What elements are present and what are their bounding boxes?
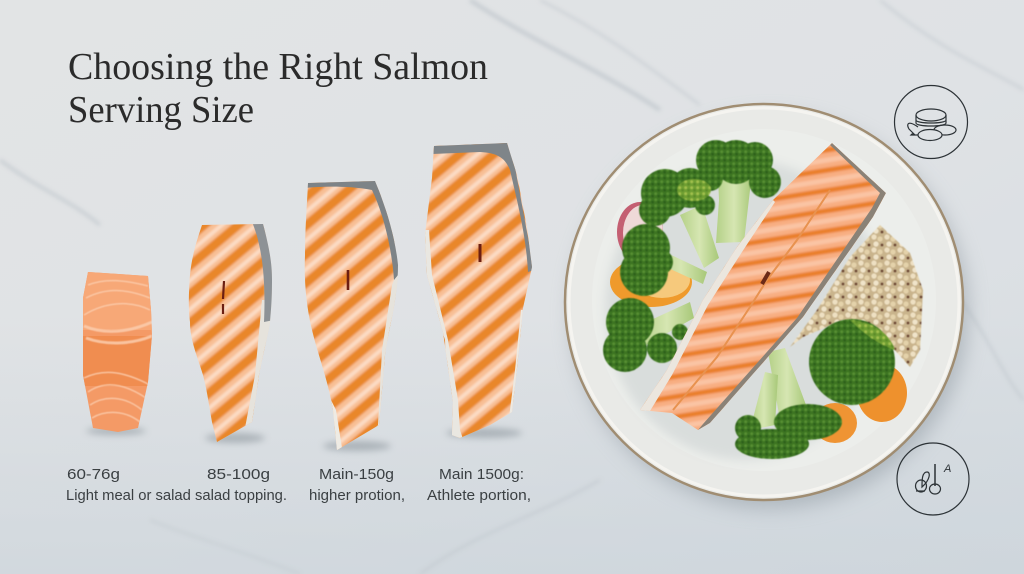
title: Choosing the Right Salmon [68,46,488,88]
plate of salmon, broccoli and quinoa [565,104,968,508]
salmon portion 3: grilled fillet [304,181,398,454]
icon: utensils and portions [897,443,969,515]
salmon portion 4: grilled fillet [420,135,534,445]
portion labels: Main 1500g: [439,466,524,483]
portion labels: 60-76g [67,466,120,483]
portion labels: higher protion, [309,487,405,504]
icon: stacked salmon portions [894,86,968,158]
vegetables under salmon [610,202,907,443]
title [68,46,488,131]
icon: utensils and portions: A [943,463,951,475]
salmon portion 1: small raw fillet [80,270,155,435]
portion labels: Athlete portion, [427,487,531,504]
broccoli florets [603,140,895,459]
portion labels: Main-150g [319,466,394,483]
quinoa [790,225,923,367]
title: Serving Size [68,89,254,131]
food shadow [605,160,885,460]
grilled salmon fillet on plate [640,143,886,430]
portion labels: 85-100g [207,466,270,483]
portion labels: Light meal or salad salad topping. [66,487,287,504]
broccoli stems [640,178,806,430]
salmon portion 2: grilled fillet [188,224,272,446]
portion labels [66,466,531,504]
